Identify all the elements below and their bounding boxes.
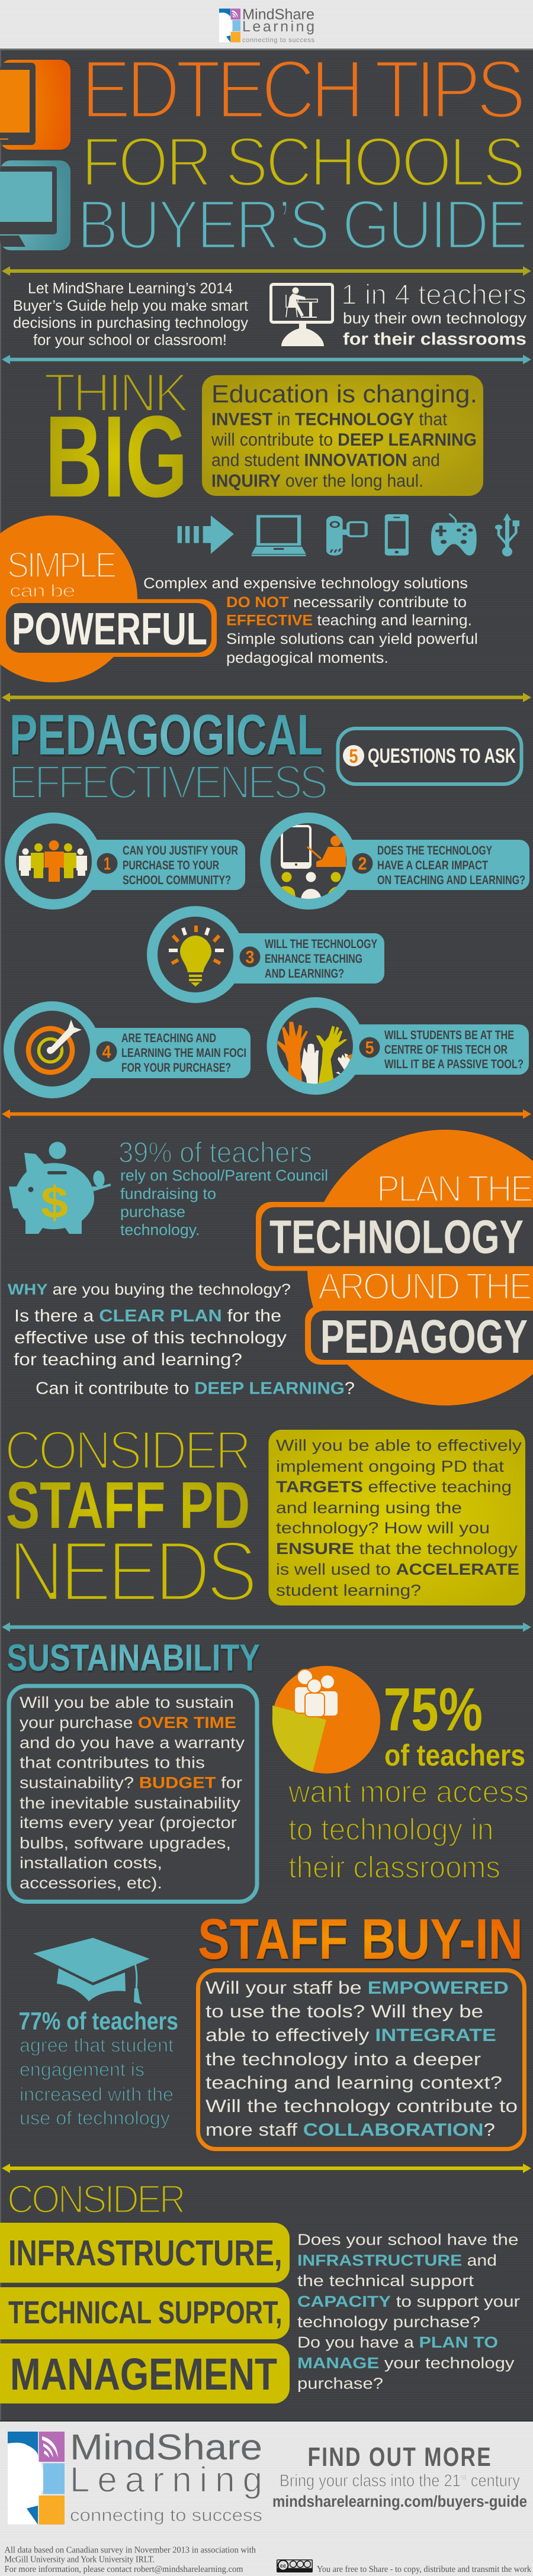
stat: 1 in 4 teachers: buy their own technology xyxy=(343,309,526,327)
panel: management bar: MANAGEMENT xyxy=(10,2349,277,2400)
panel: sustainability questions: bulbs, software upgrades, xyxy=(20,1835,231,1852)
text block: infrastructure questions: CAPACITY to support your xyxy=(297,2293,520,2310)
intro text: Let MindShare Learning’s 2014 xyxy=(28,281,233,297)
panel: staff pd questions: technology? How will you xyxy=(276,1519,490,1537)
question 5 xyxy=(266,997,529,1095)
text block: infrastructure questions: purchase? xyxy=(297,2374,383,2392)
stat: 1 in 4 teachers xyxy=(341,279,526,349)
question 1: 1 xyxy=(104,855,111,873)
question 1 xyxy=(5,813,245,910)
panel: staff buy-in questions: more staff COLLABORATION ? xyxy=(206,2120,495,2140)
icon: community people xyxy=(19,840,87,882)
text block: why buy xyxy=(8,1281,355,1398)
icon: creative commons badge xyxy=(277,2559,313,2572)
text block: why buy: Is there a CLEAR PLAN for the xyxy=(14,1307,281,1326)
panel: sustainability questions: items every year (projector xyxy=(20,1814,237,1832)
call to action: find out more: st xyxy=(461,2472,467,2482)
call to action: find out more: Bring your class into the 21 xyxy=(280,2471,487,2490)
panel: 5 questions to ask: 5 xyxy=(349,745,358,767)
heading: pedagogical effectiveness xyxy=(8,702,326,808)
panel: staff pd questions: implement ongoing PD that xyxy=(276,1458,505,1475)
icon: camcorder xyxy=(326,516,366,556)
panel: education is changing: INQUIRY over the long haul. xyxy=(211,471,423,491)
heading: consider staff pd needs xyxy=(5,1420,255,1619)
heading: think big xyxy=(44,363,188,521)
panel: education is changing: will contribute to DEEP LEARNING xyxy=(211,430,477,450)
stat: 39% of teachers: rely on School/Parent Council xyxy=(120,1166,328,1184)
panel: staff buy-in questions: teaching and learning context? xyxy=(206,2074,502,2093)
panel: simple can be powerful: can be xyxy=(9,582,75,601)
question 3: ENHANCE TEACHING xyxy=(265,952,362,966)
panel: staff buy-in questions: the technology into a deeper xyxy=(206,2050,481,2069)
text block: infrastructure questions: MANAGE your technology xyxy=(297,2354,515,2372)
panel: staff pd questions: and learning using the xyxy=(276,1499,462,1517)
icon: graduation cap xyxy=(33,1937,150,2004)
panel: simple can be powerful: SIMPLE xyxy=(7,544,116,585)
panel: staff pd questions: TARGETS effective teaching xyxy=(276,1478,512,1496)
question 5: 5 xyxy=(365,1038,374,1058)
top logo: connecting to success xyxy=(242,37,315,44)
panel: education is changing: INVEST in TECHNOLOGY that xyxy=(211,410,448,430)
question 1: PURCHASE TO YOUR xyxy=(123,859,219,872)
arrow divider xyxy=(2,1623,531,1632)
call to action: find out more xyxy=(272,2442,527,2510)
text block: why buy: effective use of this technology xyxy=(14,1329,287,1347)
panel: technical support bar: TECHNICAL SUPPORT, xyxy=(8,2295,282,2330)
panel: infrastructure bar xyxy=(0,2223,290,2283)
icons: technology devices row xyxy=(178,513,519,556)
panel: sustainability questions: accessories, etc). xyxy=(20,1874,162,1892)
arrow divider xyxy=(2,692,531,702)
text block: infrastructure questions: INFRASTRUCTURE and xyxy=(297,2251,497,2269)
icon: raised hands xyxy=(277,1022,354,1085)
chart: 75 percent pie xyxy=(272,1666,380,1774)
icon: piggy bank xyxy=(9,1142,111,1234)
stat: 1 in 4 teachers: 1 in 4 teachers xyxy=(341,279,526,311)
text block: complex and expensive: DO NOT necessarily contribute to xyxy=(226,594,467,611)
question 2: DOES THE TECHNOLOGY xyxy=(377,844,492,857)
heading: sustainability: SUSTAINABILITY xyxy=(7,1636,260,1679)
arrow divider xyxy=(2,1109,531,1118)
stat: 77 percent of teachers: 77% of teachers xyxy=(19,2007,178,2035)
top logo xyxy=(219,6,315,44)
panel: staff pd questions: student learning? xyxy=(276,1581,421,1599)
icon: arrow xyxy=(178,515,234,554)
panel: plan the technology around the pedagogy xyxy=(256,1130,533,1405)
intro text: Buyer’s Guide help you make smart xyxy=(13,298,248,314)
text block: infrastructure questions: the technical support xyxy=(297,2272,474,2290)
stat: 77 percent of teachers: engagement is xyxy=(20,2059,145,2080)
question 4: FOR YOUR PURCHASE? xyxy=(121,1061,231,1075)
question 4: 4 xyxy=(102,1043,111,1062)
panel: sustainability questions: Will you be able to sustain xyxy=(20,1694,234,1711)
question 3 xyxy=(147,906,384,1003)
heading: consider staff pd needs: NEEDS xyxy=(8,1523,255,1619)
text block: complex and expensive xyxy=(143,575,478,666)
stat: 75 percent of teachers: to technology in xyxy=(288,1813,494,1847)
footnote: data source: For more information, please contact robert@mindsharelearning.com xyxy=(5,2565,243,2574)
question 3: WILL THE TECHNOLOGY xyxy=(265,937,377,951)
icon: smartphone xyxy=(385,514,409,556)
panel: staff pd questions: is well used to ACCELERATE xyxy=(276,1561,519,1578)
panel: staff buy-in questions: able to effectively INTEGRATE xyxy=(206,2026,496,2045)
panel: staff buy-in questions: to use the tools? Will they be xyxy=(206,2002,483,2022)
text block: why buy: Can it contribute to DEEP LEARNING ? xyxy=(36,1379,355,1398)
text block: infrastructure questions: Does your school have the xyxy=(297,2231,519,2249)
question 1: SCHOOL COMMUNITY? xyxy=(123,873,231,887)
panel: 5 questions to ask xyxy=(338,728,521,784)
question 2: 2 xyxy=(358,855,367,873)
question 4 xyxy=(4,1001,251,1098)
heading: pedagogical effectiveness: EFFECTIVENESS xyxy=(8,756,326,808)
text block: infrastructure questions: Do you have a PLAN TO xyxy=(297,2333,498,2351)
panel: staff buy-in questions xyxy=(198,1971,525,2149)
text block: complex and expensive: Complex and expensive technology solutions xyxy=(143,575,468,592)
panel: education is changing: Education is changing. xyxy=(211,380,477,408)
panel: education is changing xyxy=(202,375,483,496)
top logo: Learning xyxy=(242,18,314,35)
question 3: AND LEARNING? xyxy=(265,967,344,981)
panel: sustainability questions: installation costs, xyxy=(20,1854,162,1872)
icon: orange tablet xyxy=(0,60,70,150)
stat: 77 percent of teachers: agree that student xyxy=(20,2035,174,2056)
panel: simple can be powerful: POWERFUL xyxy=(12,604,207,655)
text block: why buy: WHY are you buying the technology? xyxy=(8,1281,291,1298)
question 1: CAN YOU JUSTIFY YOUR xyxy=(123,844,238,857)
icon: teacher and class xyxy=(278,826,346,899)
call to action: find out more: century xyxy=(467,2471,520,2490)
heading: pedagogical effectiveness: PEDAGOGICAL xyxy=(9,702,323,767)
footer logo: connecting to success xyxy=(70,2506,262,2525)
footnote: data source: McGill University and York University IRLT. xyxy=(5,2555,155,2565)
text block: infrastructure questions xyxy=(297,2231,520,2392)
icon: teacher at monitor xyxy=(271,284,333,346)
stat: 39% of teachers: fundraising to xyxy=(120,1185,216,1202)
panel: simple can be powerful xyxy=(0,515,217,682)
icon: light bulb xyxy=(169,926,224,986)
arrow divider xyxy=(2,2164,531,2173)
heading: think big: THINK xyxy=(44,363,188,423)
question 4: ARE TEACHING AND xyxy=(121,1031,216,1045)
stat: 39% of teachers: purchase xyxy=(120,1202,185,1220)
question 2 xyxy=(260,813,529,910)
footer logo: MindShare xyxy=(70,2427,262,2467)
panel: sustainability questions: sustainability? BUDGET for xyxy=(20,1774,242,1792)
intro text xyxy=(13,281,248,349)
text block: why buy: for teaching and learning? xyxy=(14,1350,242,1369)
heading: consider: CONSIDER xyxy=(7,2177,184,2222)
stat: 77 percent of teachers: use of technology xyxy=(20,2107,170,2129)
arrow divider xyxy=(2,355,531,365)
panel: staff buy-in questions: Will your staff be EMPOWERED xyxy=(206,1978,509,1998)
panel: sustainability questions: your purchase OVER TIME xyxy=(20,1714,236,1732)
title xyxy=(77,43,525,264)
icon: laptop xyxy=(252,516,306,556)
stat: 75 percent of teachers: 75% xyxy=(384,1675,483,1743)
panel: staff pd questions: Will you be able to effectively xyxy=(276,1437,522,1455)
text block: complex and expensive: Simple solutions can yield powerful xyxy=(226,631,478,647)
panel: staff pd questions xyxy=(269,1430,525,1605)
intro text: for your school or classroom! xyxy=(33,332,227,349)
icon: usb symbol xyxy=(495,513,519,556)
footnote: data source xyxy=(5,2546,256,2574)
stat: 75 percent of teachers xyxy=(288,1675,529,1885)
icon: creative commons badge: cc xyxy=(280,2562,286,2568)
icon: teachers group xyxy=(294,1669,338,1717)
text block: complex and expensive: pedagogical moments. xyxy=(226,650,388,666)
heading: consider staff pd needs: STAFF PD xyxy=(6,1468,250,1542)
footer logo xyxy=(8,2427,262,2525)
icon: teal monitor xyxy=(0,160,70,250)
heading: consider staff pd needs: CONSIDER xyxy=(5,1420,249,1481)
panel: infrastructure bar: INFRASTRUCTURE, xyxy=(8,2233,282,2273)
panel: technical support bar xyxy=(0,2287,290,2339)
stat: 1 in 4 teachers: for their classrooms xyxy=(343,330,526,349)
intro text: decisions in purchasing technology xyxy=(13,315,248,331)
arrow divider xyxy=(2,266,531,276)
icon: piggy bank: $ xyxy=(41,1178,68,1228)
stat: 39% of teachers: technology. xyxy=(120,1221,200,1239)
panel: education is changing: and student INNOVATION and xyxy=(211,451,440,470)
stat: 77 percent of teachers: increased with the xyxy=(20,2084,174,2105)
panel: sustainability questions: the inevitable sustainability xyxy=(20,1794,241,1812)
icon: target and dart xyxy=(28,1020,82,1072)
icon: game controller xyxy=(431,514,477,556)
stat: 39% of teachers xyxy=(118,1137,328,1239)
question 4: LEARNING THE MAIN FOCI xyxy=(121,1046,246,1060)
text block: complex and expensive: EFFECTIVE teaching and learning. xyxy=(226,612,472,628)
footer logo: Learning xyxy=(70,2459,262,2500)
panel: sustainability questions: that contributes to this xyxy=(20,1754,205,1772)
panel: sustainability questions xyxy=(9,1686,257,1902)
question 3: 3 xyxy=(245,948,255,967)
stat: 39% of teachers: 39% of teachers xyxy=(118,1137,312,1169)
footnote: data source: All data based on Canadian survey in November 2013 in association with xyxy=(5,2546,256,2555)
stat: 75 percent of teachers: want more access xyxy=(288,1775,529,1810)
text block: infrastructure questions: technology purchase? xyxy=(297,2313,480,2330)
stat: 77 percent of teachers xyxy=(19,2007,178,2129)
panel: staff buy-in questions: Will the technology contribute to xyxy=(206,2097,518,2116)
top logo: MindShare xyxy=(242,6,314,22)
heading: think big: BIG xyxy=(45,392,188,521)
panel: sustainability questions: and do you have a warranty xyxy=(20,1734,245,1752)
question 2: HAVE A CLEAR IMPACT xyxy=(377,859,488,872)
panel: staff pd questions: ENSURE that the technology xyxy=(276,1540,518,1558)
stat: 75 percent of teachers: their classrooms xyxy=(288,1850,500,1885)
